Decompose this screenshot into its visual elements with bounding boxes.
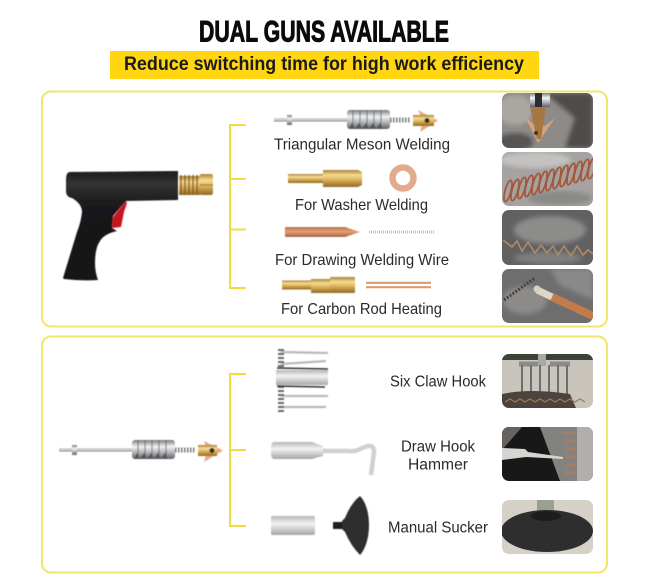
icon: carbon rod pin [282, 277, 355, 293]
label: drawing welding wire: For Drawing Welding Wire [275, 252, 449, 269]
subtitle banner: Reduce switching time for high work efficiency [124, 54, 524, 75]
icon: copper washer [392, 168, 414, 188]
title: DUAL GUNS AVAILABLE [199, 16, 449, 48]
photo: carbon rod heating [502, 269, 593, 323]
label: manual sucker: Manual Sucker [388, 520, 488, 536]
label: washer welding: For Washer Welding [295, 197, 428, 214]
icon: drawing wire copper pin [285, 227, 360, 237]
label: draw hook hammer [401, 438, 475, 474]
icon: rubber sucker [333, 496, 369, 555]
icon: washer welding pin [288, 170, 362, 187]
panel: slide hammer attachments [42, 336, 607, 572]
label: carbon rod heating: For Carbon Rod Heating [281, 301, 442, 318]
label: triangular meson welding: Triangular Meson Welding [274, 136, 450, 154]
photo: manual sucker in use [501, 500, 593, 554]
icon: welding wire [369, 230, 434, 234]
icon: triangular meson slide hammer [274, 110, 438, 132]
photo: triangular meson welding [502, 93, 593, 148]
photo: drawn welding wire [502, 210, 593, 265]
icon: six claw hook [276, 349, 328, 412]
label: draw hook hammer: Draw Hook [401, 438, 475, 456]
panel: spot welding gun attachments [42, 92, 607, 326]
icon: slide hammer [59, 440, 223, 462]
icon: hex socket [271, 516, 315, 535]
label: six claw hook: Six Claw Hook [390, 374, 486, 390]
photo: six claw hook in use [502, 354, 593, 408]
icon: welding gun [63, 171, 213, 280]
icon: carbon rods [366, 283, 431, 287]
photo: washer spring welding [499, 152, 598, 206]
bracket: gun attachments [230, 125, 246, 288]
bracket: hammer attachments [230, 374, 246, 526]
label: draw hook hammer: Hammer [408, 456, 468, 474]
icon: draw hook hammer [271, 442, 374, 475]
photo: draw hook hammer in use [502, 427, 593, 481]
